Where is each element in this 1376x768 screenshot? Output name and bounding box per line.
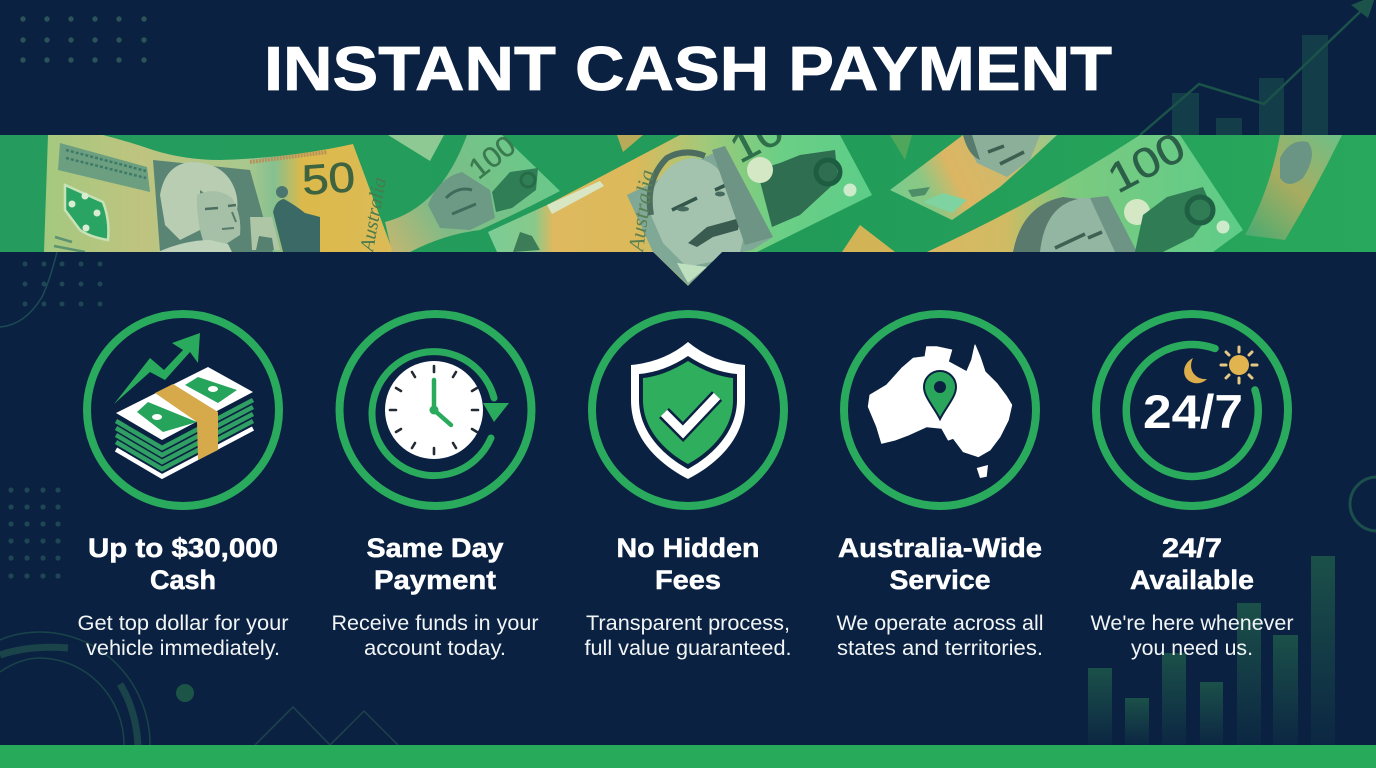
concentric arcs: lower left [0, 632, 150, 745]
icon: clock [340, 314, 532, 506]
heading line 2: Available [1130, 565, 1254, 595]
mountain outline [255, 707, 398, 745]
description: Get top dollar for your [78, 611, 288, 635]
banknote: centre portrait 100 [488, 135, 872, 286]
description: We're here whenever [1090, 611, 1294, 635]
heading line 2: Cash [150, 565, 216, 595]
description line 2: full value guaranteed. [584, 636, 792, 660]
banknote: far right note [1245, 135, 1342, 240]
feature: 24/7 available [1090, 314, 1294, 660]
dot grid: top left [20, 16, 147, 63]
bar chart: lower right [1088, 556, 1335, 745]
icon: 24/7 ring [1096, 314, 1288, 506]
description line 2: states and territories. [837, 636, 1043, 660]
feature: up to $30,000 cash [78, 314, 288, 660]
ring: right edge [1350, 477, 1376, 531]
description line 2: account today. [364, 636, 506, 660]
title: INSTANT CASH PAYMENT [264, 35, 1112, 104]
heading line 2: Fees [655, 565, 721, 595]
denomination: 100 [722, 93, 815, 172]
script: Australia [356, 176, 391, 255]
icon: map of australia with pin [844, 314, 1036, 506]
icon: shield [592, 314, 784, 506]
feature: no hidden fees [584, 314, 792, 660]
heading: Same Day [366, 533, 504, 563]
heading: 24/7 [1162, 533, 1222, 563]
banknote: 50 [44, 135, 393, 255]
description: We operate across all [836, 611, 1044, 635]
script: Australia [623, 168, 659, 255]
heading: No Hidden [616, 533, 760, 563]
feature: australia-wide service [836, 314, 1044, 660]
banknote banner [0, 135, 1376, 286]
icon: cash stack [87, 314, 279, 506]
heading: Up to $30,000 [88, 533, 278, 563]
description line 2: vehicle immediately. [86, 636, 280, 660]
dot grid: lower left [8, 487, 61, 579]
banknote: upper right note [890, 135, 1057, 220]
decorative curve and dots under banner [0, 252, 102, 327]
description: Transparent process, [586, 611, 790, 635]
small note fragments [388, 135, 912, 252]
icon: 24/7 ring: 24/7 [1143, 385, 1243, 438]
banknote: large right 100 [927, 123, 1243, 252]
footer bar [0, 745, 1376, 768]
denomination: 50 [300, 153, 357, 204]
banknote: small 100 [385, 130, 560, 252]
feature: same day payment [332, 314, 538, 660]
accent dot [176, 684, 194, 702]
denomination: 100 [1100, 123, 1193, 202]
heading line 2: Service [890, 565, 990, 595]
description line 2: you need us. [1131, 636, 1253, 660]
description: Receive funds in your [332, 611, 538, 635]
growth chart: top right [1140, 0, 1376, 135]
denomination: 100 [463, 130, 522, 186]
heading line 2: Payment [374, 565, 496, 595]
heading: Australia-Wide [838, 533, 1042, 563]
